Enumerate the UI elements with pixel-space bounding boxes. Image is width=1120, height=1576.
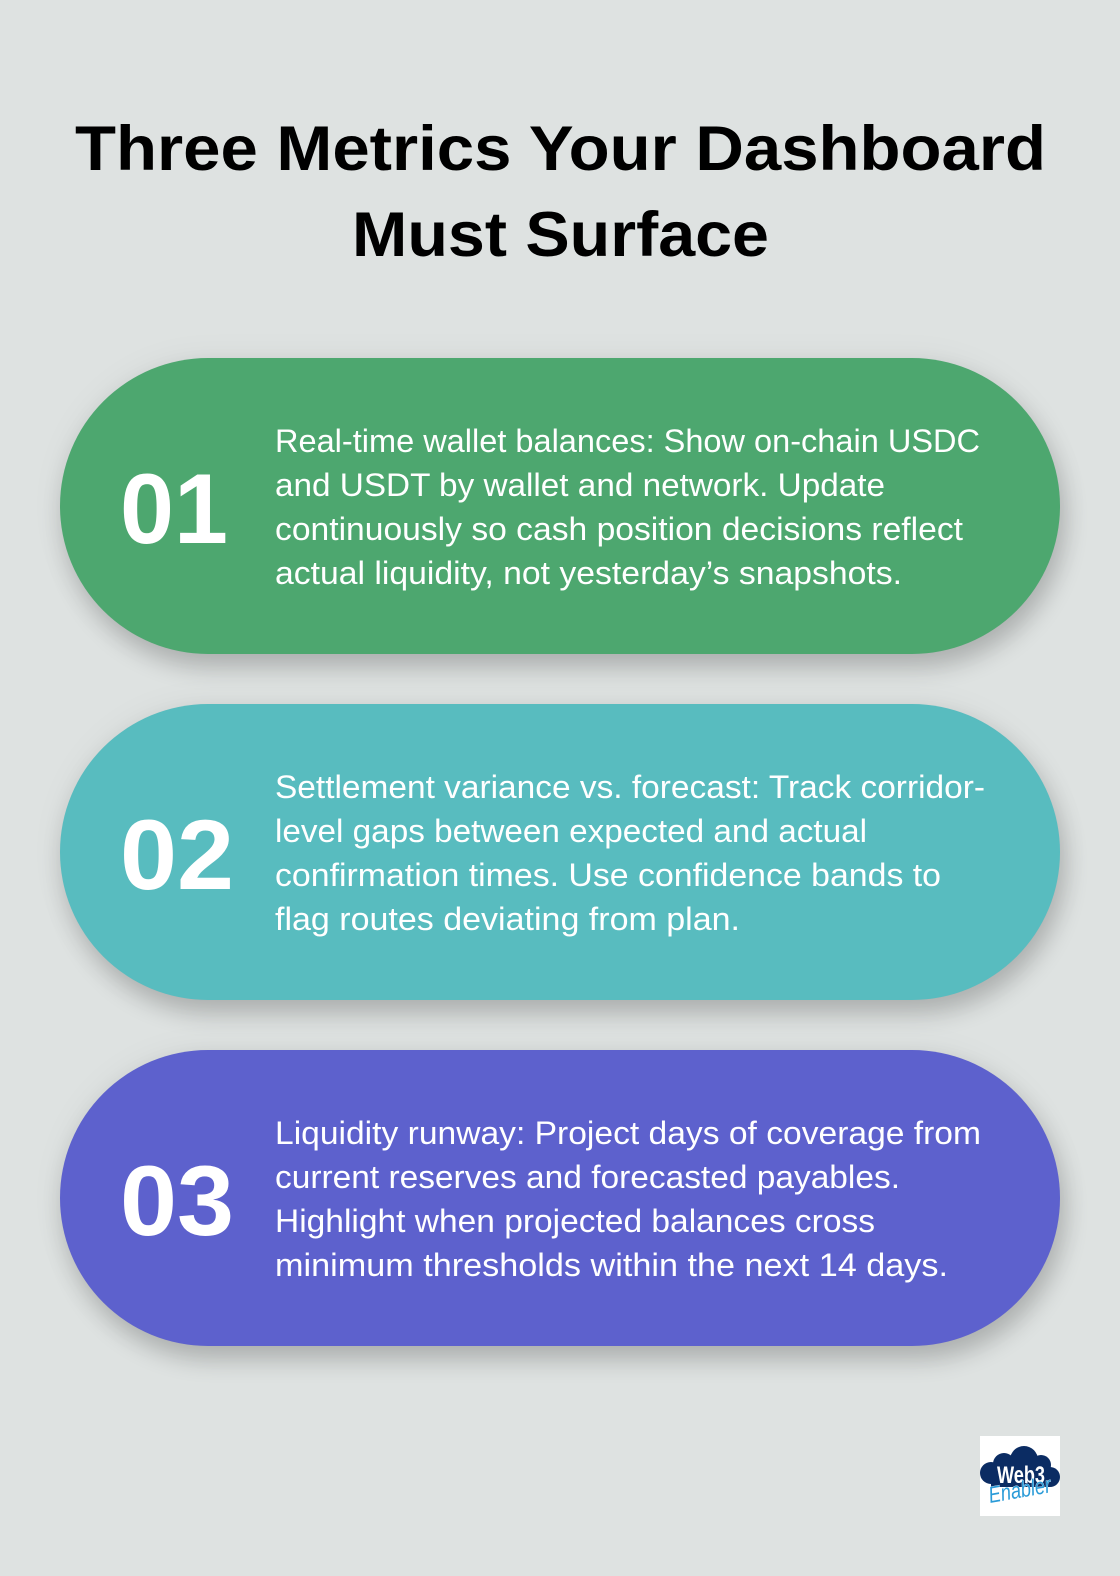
title: Three Metrics Your Dashboard — [75, 114, 1046, 184]
panel: metric 3 background — [60, 1050, 1060, 1346]
metric 2 number: 02 — [120, 799, 234, 910]
metric 1 text: continuously so cash position decisions reflect — [275, 511, 963, 547]
metric 1 text — [275, 423, 980, 591]
metric 2 text: level gaps between expected and actual — [275, 813, 867, 849]
metric 2 text: Settlement variance vs. forecast: Track corridor- — [275, 769, 985, 805]
panel: metric 2 background — [60, 704, 1060, 1000]
title: Must Surface — [352, 200, 769, 270]
metric 1 number: 01 — [120, 453, 228, 564]
metric 1 text: actual liquidity, not yesterday’s snapshots. — [275, 555, 902, 591]
metric 3 text: Liquidity runway: Project days of coverage from — [275, 1115, 981, 1151]
metric 1 text: Real-time wallet balances: Show on-chain USDC — [275, 423, 980, 459]
metric 3 text — [275, 1115, 981, 1283]
logo: Web3 Enabler cloud — [980, 1436, 1060, 1516]
logo: Web3 Enabler cloud: Web3 — [997, 1462, 1045, 1489]
metric 3 text: Highlight when projected balances cross — [275, 1203, 875, 1239]
metric 3 text: minimum thresholds within the next 14 days. — [275, 1247, 948, 1283]
metric 2 text: flag routes deviating from plan. — [275, 901, 740, 937]
metric 2 text: confirmation times. Use confidence bands to — [275, 857, 941, 893]
logo: Web3 Enabler cloud: Enabler — [986, 1471, 1054, 1508]
metric 1 text: and USDT by wallet and network. Update — [275, 467, 885, 503]
metric 3 text: current reserves and forecasted payables. — [275, 1159, 900, 1195]
panel: metric 1 background — [60, 358, 1060, 654]
metric 3 number: 03 — [120, 1145, 234, 1256]
title — [75, 114, 1046, 270]
metric 2 text — [275, 769, 985, 937]
